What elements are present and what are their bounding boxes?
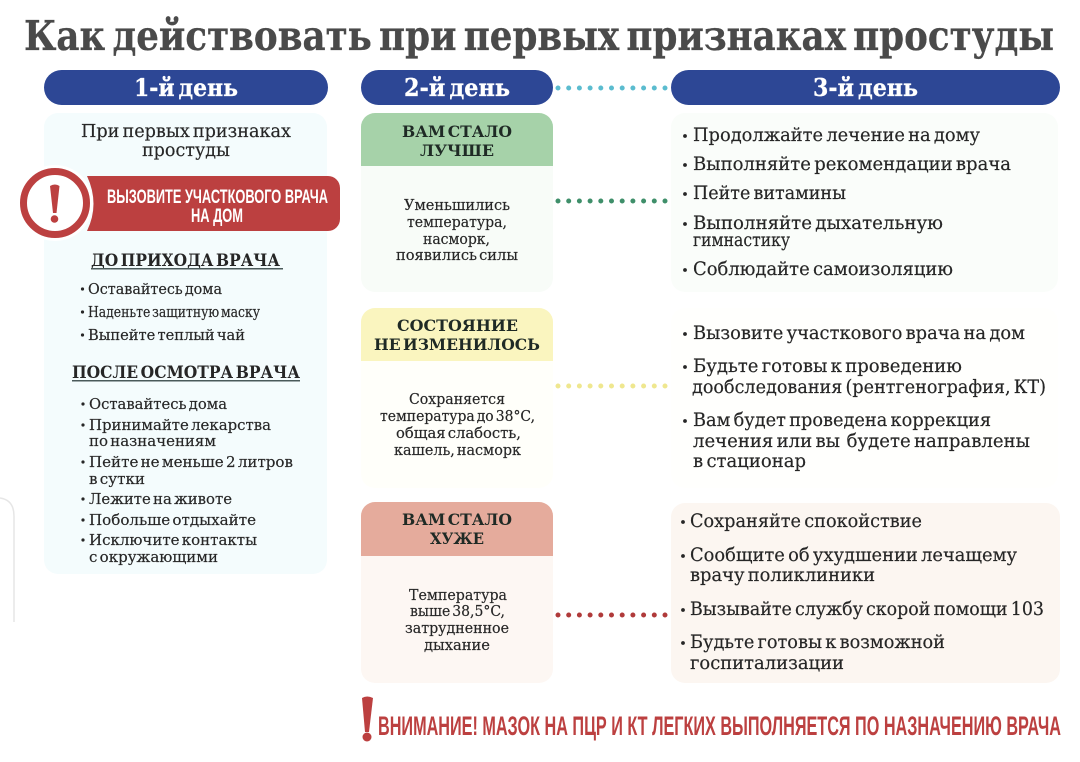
- list: after the examination: [81, 395, 293, 566]
- panel: day 2 worse: дыхание: [424, 638, 490, 654]
- panel: day 2 worse: [361, 502, 553, 683]
- list: before the doctor arrives: Наденьте защитную маску: [88, 303, 260, 321]
- list: after the examination: Побольше отдыхайте: [89, 511, 256, 529]
- panel: day 3 worse: [671, 503, 1060, 683]
- panel: day 2 better: ЛУЧШЕ: [420, 141, 494, 160]
- panel: day 2 unchanged: СОСТОЯНИЕ: [397, 316, 518, 335]
- connector: day 2 to day 3: [558, 86, 667, 90]
- panel: day 3 better: гимнастику: [693, 230, 790, 251]
- panel: day 2 better: ВАМ СТАЛО: [402, 122, 512, 141]
- panel: day 3 better: [671, 113, 1058, 292]
- list: after the examination: Принимайте лекарства: [89, 416, 271, 434]
- list: after the examination: с окружающими: [89, 548, 218, 566]
- intro text: простуды: [142, 141, 230, 161]
- list: after the examination: по назначениям: [89, 432, 216, 450]
- heading: before the doctor arrives: ДО ПРИХОДА ВРАЧА: [91, 251, 281, 270]
- list: before the doctor arrives: [81, 280, 260, 344]
- list: after the examination: Оставайтесь дома: [89, 395, 227, 413]
- connector: better: [558, 198, 667, 204]
- panel: day 3 worse: Сохраняйте спокойствие: [690, 511, 922, 532]
- panel: day 2 worse: ХУЖЕ: [430, 529, 484, 548]
- connector: worse: [558, 612, 667, 618]
- panel: day 3 worse: Вызывайте службу скорой помощи 103: [690, 599, 1044, 620]
- panel: day 3 unchanged: Будьте готовы к проведению: [693, 356, 962, 377]
- panel: day 1: [17, 113, 340, 574]
- intro text: При первых признаках: [81, 122, 291, 142]
- panel: day 3 unchanged: [671, 308, 1058, 488]
- panel: day 3 worse: Сообщите об ухудшении лечащему: [690, 545, 1017, 566]
- header: day 1: 1-й день: [134, 73, 238, 102]
- header: day 2: [361, 70, 553, 105]
- panel: day 3 better: Пейте витамины: [693, 183, 846, 204]
- panel: day 2 unchanged: Сохраняется: [409, 392, 505, 408]
- list: after the examination: Лежите на животе: [89, 490, 232, 508]
- callout: call the doctor: [17, 165, 340, 241]
- panel: day 2 better: появились силы: [396, 248, 518, 264]
- warning note: [362, 696, 1061, 742]
- intro text: [81, 122, 291, 161]
- panel: day 2 better: температура,: [407, 215, 507, 231]
- panel: day 2 worse: затрудненное: [405, 621, 509, 637]
- panel: day 3 better: Соблюдайте самоизоляцию: [693, 259, 953, 280]
- list: after the examination: Пейте не меньше 2 литров: [89, 453, 293, 471]
- panel: day 2 unchanged: кашель, насморк: [394, 443, 521, 459]
- panel: day 3 unchanged: Вызовите участкового врача на дом: [693, 323, 1025, 344]
- panel: day 3 better: Выполняйте дыхательную: [693, 213, 943, 234]
- panel: day 3 unchanged: в стационар: [693, 451, 806, 472]
- list: after the examination: Исключите контакты: [89, 531, 257, 549]
- heading: after the examination: ПОСЛЕ ОСМОТРА ВРАЧА: [72, 363, 301, 382]
- panel: day 2 unchanged: НЕ ИЗМЕНИЛОСЬ: [374, 335, 540, 354]
- panel: day 2 unchanged: [361, 308, 553, 488]
- header: day 2: 2-й день: [404, 73, 510, 102]
- header: day 3: 3-й день: [813, 73, 918, 102]
- connector: unchanged: [558, 384, 667, 388]
- panel: day 2 worse: ВАМ СТАЛО: [402, 510, 512, 529]
- panel: day 2 worse: Температура: [409, 588, 507, 604]
- header: day 1: [44, 70, 328, 105]
- panel: day 3 better: Продолжайте лечение на дому: [693, 125, 980, 146]
- panel: day 2 better: насморк,: [423, 232, 490, 248]
- panel: day 3 worse: госпитализации: [690, 653, 844, 674]
- panel: day 3 better: Выполняйте рекомендации врача: [693, 154, 1011, 175]
- panel: day 3 worse: врачу поликлиники: [690, 565, 875, 586]
- panel: day 2 unchanged: общая слабость,: [396, 426, 521, 442]
- header: day 3: [671, 70, 1060, 105]
- panel: day 2 better: [361, 113, 553, 292]
- panel: day 3 unchanged: лечения или вы будете направлены: [693, 431, 1030, 452]
- panel: day 2 worse: выше 38,5°C,: [410, 604, 505, 620]
- list: after the examination: в сутки: [89, 470, 145, 488]
- callout: call the doctor: ВЫЗОВИТЕ УЧАСТКОВОГО ВРАЧА: [107, 186, 328, 208]
- panel: day 3 unchanged: Вам будет проведена коррекция: [693, 410, 991, 431]
- list: before the doctor arrives: Оставайтесь дома: [88, 280, 222, 298]
- panel: day 3 worse: Будьте готовы к возможной: [690, 632, 945, 653]
- panel: day 2 unchanged: температура до 38°C,: [380, 409, 535, 425]
- list: before the doctor arrives: Выпейте теплый чай: [88, 326, 245, 344]
- panel: day 3 unchanged: дообследования (рентгенография, КТ): [692, 377, 1046, 398]
- panel: day 2 better: Уменьшились: [404, 198, 510, 214]
- callout: call the doctor: НА ДОМ: [191, 205, 243, 227]
